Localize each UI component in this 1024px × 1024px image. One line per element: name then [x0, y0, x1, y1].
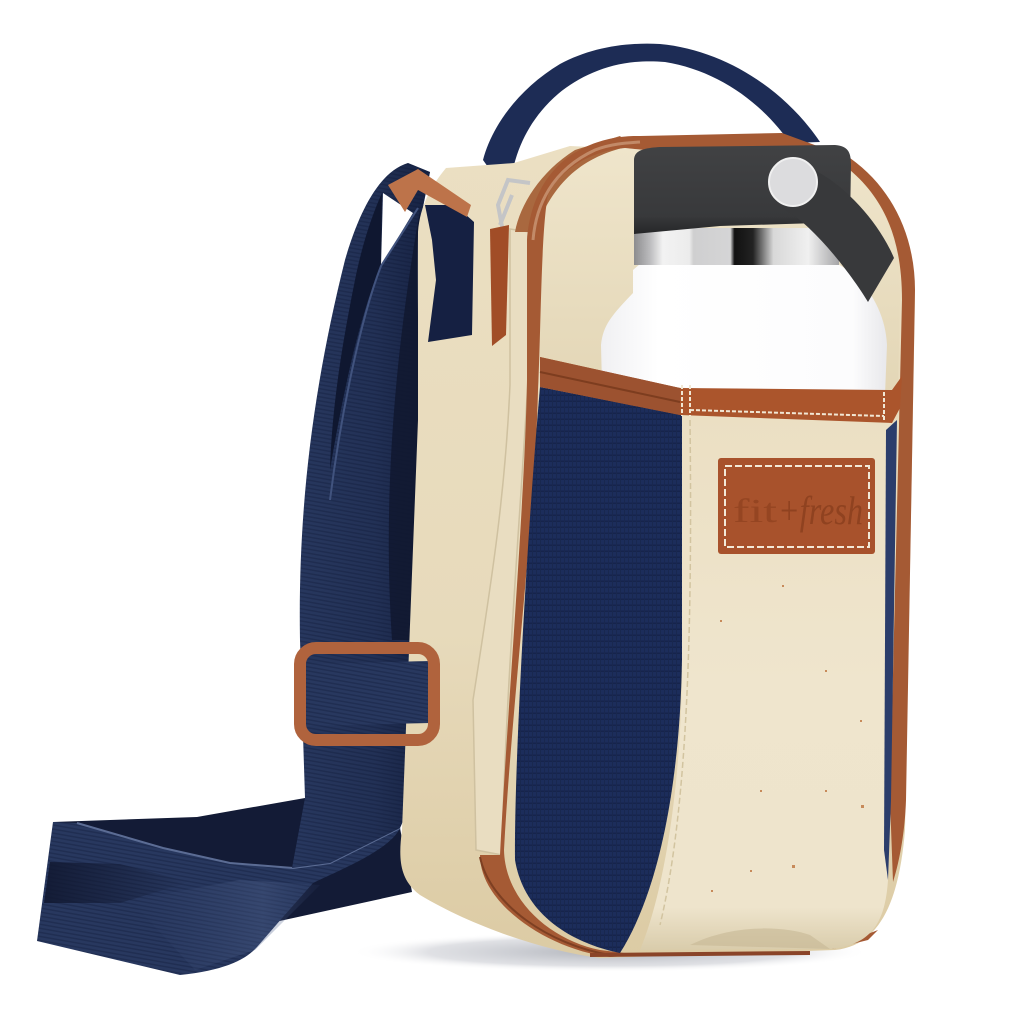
- front canvas pocket: [640, 415, 892, 950]
- ground shadow: [350, 932, 870, 972]
- patch text: fit: [733, 493, 778, 530]
- strap tail front band: [37, 822, 400, 975]
- dark back of strap: [330, 193, 382, 470]
- steel neck: [634, 228, 839, 265]
- strap vertical run: [292, 163, 430, 868]
- inner bag wall: [540, 148, 900, 395]
- bag body canvas: [400, 146, 915, 958]
- leather logo patch: +fresh: [778, 488, 863, 533]
- strap buckle: [300, 648, 434, 740]
- leather logo patch: [718, 458, 875, 554]
- side panel flap: [473, 229, 530, 855]
- bottle cap: [634, 145, 851, 234]
- pocket leather trim: [540, 357, 902, 423]
- mesh pocket: [515, 387, 682, 953]
- zipper teeth band and leather piping: [480, 133, 915, 957]
- leather strap tab: [388, 169, 471, 217]
- bottle: [601, 145, 894, 395]
- strap tail back band: [53, 798, 412, 922]
- top carry handle: [483, 44, 820, 167]
- zipper pull: [490, 180, 530, 346]
- bottle body: [601, 262, 887, 395]
- gap behind strap: [381, 193, 413, 266]
- steel button: [769, 158, 817, 206]
- canvas specks: [711, 585, 864, 892]
- right edge navy gusset: [884, 420, 897, 880]
- strap loop: [425, 205, 474, 342]
- cap strap: [782, 160, 894, 302]
- shoulder strap: [37, 163, 430, 975]
